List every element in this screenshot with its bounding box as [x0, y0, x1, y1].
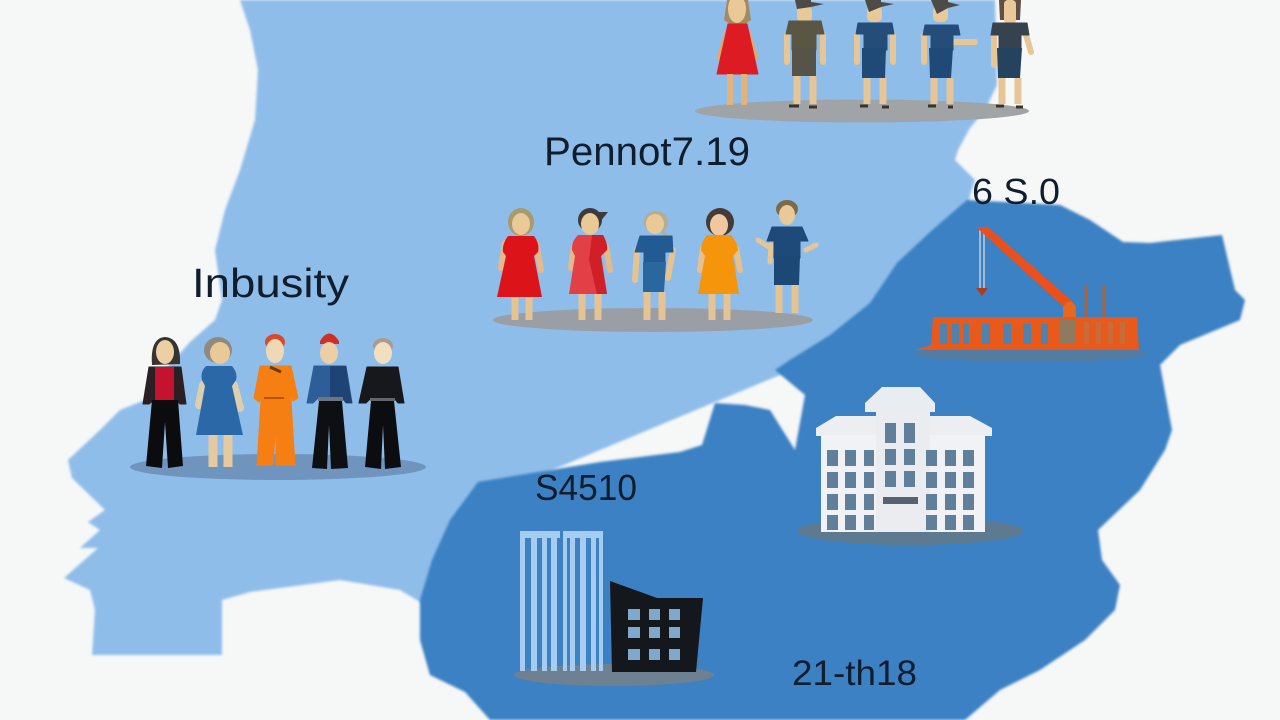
person: man pointing [923, 0, 975, 107]
government building [797, 387, 1023, 545]
barge shadow [913, 346, 1147, 362]
roof wings [816, 416, 992, 436]
label: lower left number: S4510 [535, 467, 637, 508]
label: Inbusity: Inbusity [192, 260, 350, 306]
person: child in blue [635, 211, 673, 320]
group of people: top row [695, 0, 1031, 122]
person: man in blue jacket [307, 334, 352, 469]
towers shadow [514, 664, 714, 686]
label: top right number: 6 S.0 [972, 171, 1060, 212]
crane boom [976, 227, 1073, 310]
office towers [514, 531, 714, 686]
crane cable and hook [980, 230, 984, 290]
person: boy in navy [758, 200, 816, 313]
stacks [1086, 285, 1104, 317]
barge hull [915, 317, 1139, 350]
group of people: left row [130, 334, 426, 480]
windows [827, 423, 974, 530]
left and right glass towers [520, 531, 603, 538]
building body [821, 435, 985, 532]
person: man in navy shirt [856, 0, 894, 107]
person: woman in coral dress [569, 208, 610, 320]
person: woman in blue dress [196, 337, 243, 467]
person: man in black suit [359, 338, 404, 469]
hull openings [940, 324, 1048, 344]
label: top centre number: Pennot7.19 [544, 130, 750, 174]
person: worker in orange overalls [254, 334, 298, 465]
person: woman in orange dress [698, 208, 740, 320]
platform shadow [695, 100, 1029, 122]
platform shadow [493, 308, 813, 332]
building shadow [797, 517, 1023, 545]
map region: dark blue [420, 200, 1245, 720]
crane barge [913, 227, 1147, 362]
crane cabin [1063, 302, 1076, 317]
person: person in dark shirt [991, 0, 1031, 107]
person: woman in black jacket [143, 337, 186, 468]
platform shadow [130, 454, 426, 480]
map region: light blue [64, 0, 997, 655]
block windows [628, 609, 680, 660]
dark office block [610, 581, 703, 672]
entrance sign [883, 497, 918, 504]
person: woman in red dress [497, 208, 542, 320]
label: bottom number: 21-th18 [792, 654, 917, 693]
person: man in olive shirt [786, 0, 824, 107]
dome roof [865, 387, 935, 412]
person: woman in red dress [717, 0, 758, 105]
group of people: middle row [493, 200, 816, 332]
